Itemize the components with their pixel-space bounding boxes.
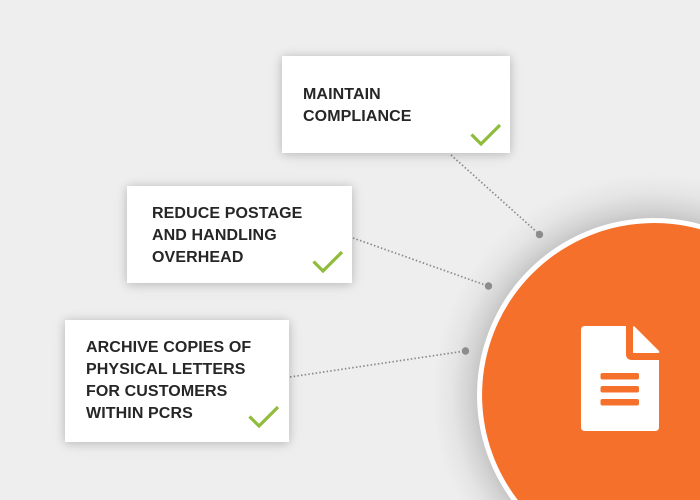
text: archive copies: WITHIN PCRS bbox=[86, 405, 193, 422]
text: maintain compliance: COMPLIANCE bbox=[303, 108, 412, 125]
panel: maintain compliance bbox=[282, 56, 510, 153]
connector: archive bbox=[290, 347, 469, 377]
text: reduce postage: REDUCE POSTAGE bbox=[152, 205, 302, 222]
text: reduce postage: OVERHEAD bbox=[152, 249, 243, 266]
panel: archive copies bbox=[65, 320, 289, 442]
text: archive copies: PHYSICAL LETTERS bbox=[86, 361, 246, 378]
icon: check mark bbox=[312, 250, 344, 274]
connector: compliance bbox=[451, 155, 543, 238]
connector: postage bbox=[353, 238, 492, 290]
text: archive copies: ARCHIVE COPIES OF bbox=[86, 339, 251, 356]
text: archive copies bbox=[86, 339, 251, 422]
panel: reduce postage bbox=[127, 186, 352, 283]
icon: check mark bbox=[248, 406, 280, 428]
icon: document bbox=[581, 326, 659, 431]
text: reduce postage bbox=[152, 205, 302, 266]
text: maintain compliance bbox=[303, 86, 412, 125]
text: maintain compliance: MAINTAIN bbox=[303, 86, 381, 103]
text: archive copies: FOR CUSTOMERS bbox=[86, 383, 227, 400]
text: reduce postage: AND HANDLING bbox=[152, 227, 277, 244]
icon: check mark bbox=[470, 124, 502, 146]
orange circle bbox=[477, 218, 700, 500]
